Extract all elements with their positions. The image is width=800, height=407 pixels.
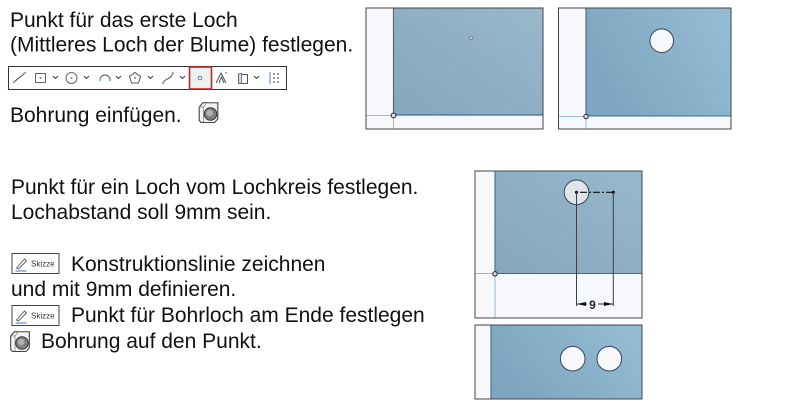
icon: sketch button [12,254,59,274]
heading: first hole instruction: (Mittleres Loch der Blume) festlegen. [10,34,353,56]
text: hole on point: Bohrung auf den Punkt. [41,330,262,353]
construction line [580,191,613,193]
dimension 9: 9 [589,298,596,312]
panel: two holes result [475,325,642,399]
hole 1 [560,346,585,371]
icon: hole tool [199,103,218,122]
heading: first hole instruction: Punkt für das erste Loch [10,9,238,32]
panel: sketch point placed [366,8,543,129]
heading: first hole instruction [10,9,353,56]
icon: hole tool [11,332,29,352]
hole 2 [597,346,622,371]
text block: hole circle instruction [11,176,418,224]
text: draw construction line: Konstruktionslinie zeichnen [71,253,325,276]
text: define 9mm: und mit 9mm definieren. [11,278,236,301]
highlighted point tool [190,67,212,89]
text block: hole circle instruction: Lochabstand soll 9mm sein. [11,201,271,224]
text block: hole circle instruction: Punkt für ein Loch vom Lochkreis festlegen. [11,176,418,199]
dimension 9 [576,192,613,312]
hole [650,29,674,52]
icon: sketch button [12,306,59,326]
panel: hole cut [558,8,731,129]
text: insert hole: Bohrung einfügen. [10,104,182,127]
sketch point [470,36,472,40]
panel: dimensioned sketch [475,171,642,318]
text: set point: Punkt für Bohrloch am Ende festlegen [71,304,425,327]
first hole with sketch overlay [564,180,589,205]
toolbar [8,66,286,90]
